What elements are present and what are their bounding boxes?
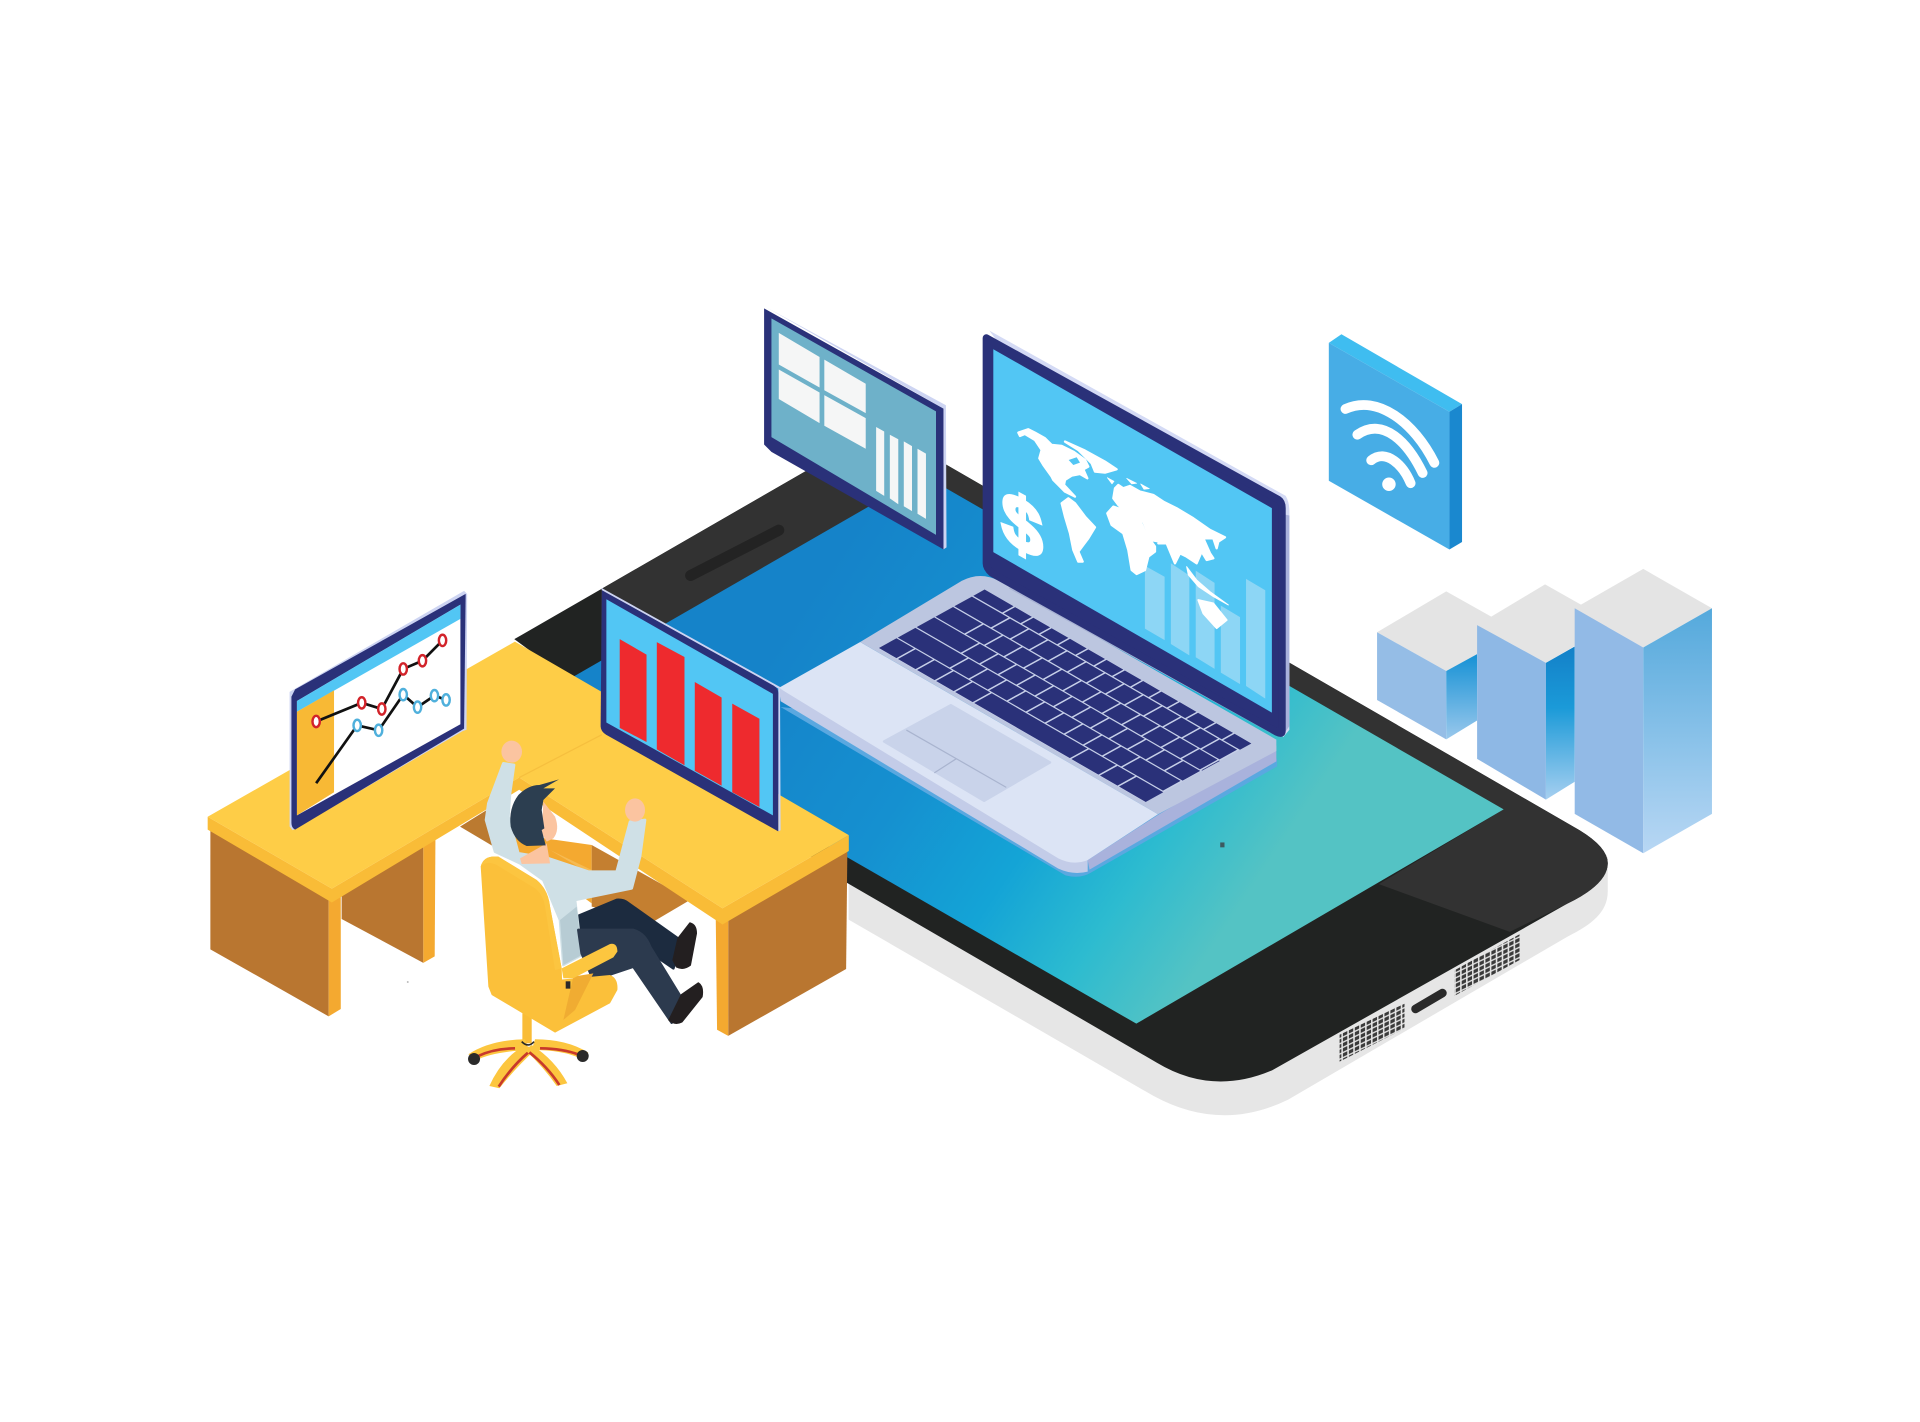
desk top [208, 642, 849, 908]
screen bars [1145, 563, 1265, 699]
line chart: red series [312, 635, 446, 727]
laptop base [779, 576, 1277, 877]
trackpad dividers [906, 730, 1006, 787]
speaker grille left [1340, 1004, 1404, 1062]
africa [1107, 507, 1155, 574]
hair [510, 779, 559, 846]
medium block [1477, 584, 1614, 800]
north america [1018, 429, 1088, 497]
monitor: red bar chart [601, 588, 781, 831]
wifi block [1329, 334, 1462, 550]
red bars [620, 639, 759, 807]
block face [1329, 343, 1449, 550]
shirt [486, 763, 645, 965]
left hand [501, 741, 522, 763]
monitor frame [291, 594, 466, 830]
panel bars [876, 427, 926, 519]
neck [520, 843, 550, 864]
screen speck [1220, 842, 1224, 847]
phone screen [553, 475, 1504, 1024]
back shoe [673, 923, 696, 968]
chair seat [555, 975, 617, 1033]
panel screen [771, 318, 936, 535]
australia [1198, 600, 1227, 628]
tall block [1575, 569, 1712, 853]
monitor screen [297, 605, 460, 815]
armrest [562, 944, 617, 978]
right hand [625, 798, 645, 822]
line chart: blue series [316, 689, 450, 783]
chair back [481, 856, 563, 1033]
world map [1018, 429, 1228, 605]
block top [1329, 334, 1462, 412]
hudson bay [1069, 457, 1080, 465]
keyboard [878, 589, 1252, 802]
desk edge [208, 778, 849, 924]
shirt shadow [560, 907, 582, 965]
phone body [514, 427, 1608, 1081]
charging port [1416, 993, 1442, 1009]
right pedestal [716, 851, 847, 1036]
stray dot [407, 981, 409, 983]
panel tiles [779, 333, 866, 449]
chair back trim [481, 856, 562, 970]
person on office chair [468, 741, 702, 1088]
chair base [468, 1039, 588, 1088]
trackpad [884, 705, 1050, 801]
floating panel: tiles and bars [764, 307, 947, 549]
monitor edge [601, 588, 781, 831]
lid frame [986, 338, 1282, 733]
front leg [578, 930, 687, 1023]
front shoe [669, 983, 702, 1023]
panel frame [764, 308, 943, 549]
lid shadow [1010, 587, 1272, 731]
monitor header [297, 605, 460, 712]
phone upper bezel [601, 427, 1608, 932]
monitor screen [606, 599, 773, 815]
under-desk panels [460, 810, 690, 922]
chair wheels [468, 1050, 589, 1065]
panel edge highlight [767, 307, 947, 549]
dollar sign: $ [1002, 473, 1042, 577]
laptop [779, 331, 1289, 877]
phone speaker slot [691, 530, 779, 576]
monitor: line chart [290, 591, 467, 830]
corner desk [208, 642, 849, 1036]
laptop screen [993, 349, 1272, 713]
desk seam [519, 735, 602, 778]
southeast asia islands [1187, 567, 1228, 605]
data blocks [1377, 569, 1712, 853]
greenland [1065, 442, 1117, 473]
monitor edge [290, 591, 467, 830]
chair seat shadow [563, 973, 593, 1020]
back leg [577, 900, 680, 968]
lid right side [1283, 514, 1289, 735]
south america [1062, 498, 1095, 562]
lid edge [989, 331, 1289, 737]
speaker grille right [1454, 934, 1520, 996]
chair post [522, 1013, 532, 1043]
block side [1449, 404, 1462, 550]
small block [1377, 591, 1518, 739]
phone side edge [849, 857, 1608, 1115]
monitor sidebar [297, 690, 334, 815]
monitor frame [601, 590, 778, 831]
icon: wifi [1345, 405, 1434, 488]
armrest bolt [566, 981, 570, 989]
smartphone [514, 427, 1608, 1115]
eurasia [1113, 485, 1225, 563]
left pedestal [210, 829, 435, 1016]
face [542, 802, 557, 842]
iceland and svalbard [1107, 478, 1149, 489]
